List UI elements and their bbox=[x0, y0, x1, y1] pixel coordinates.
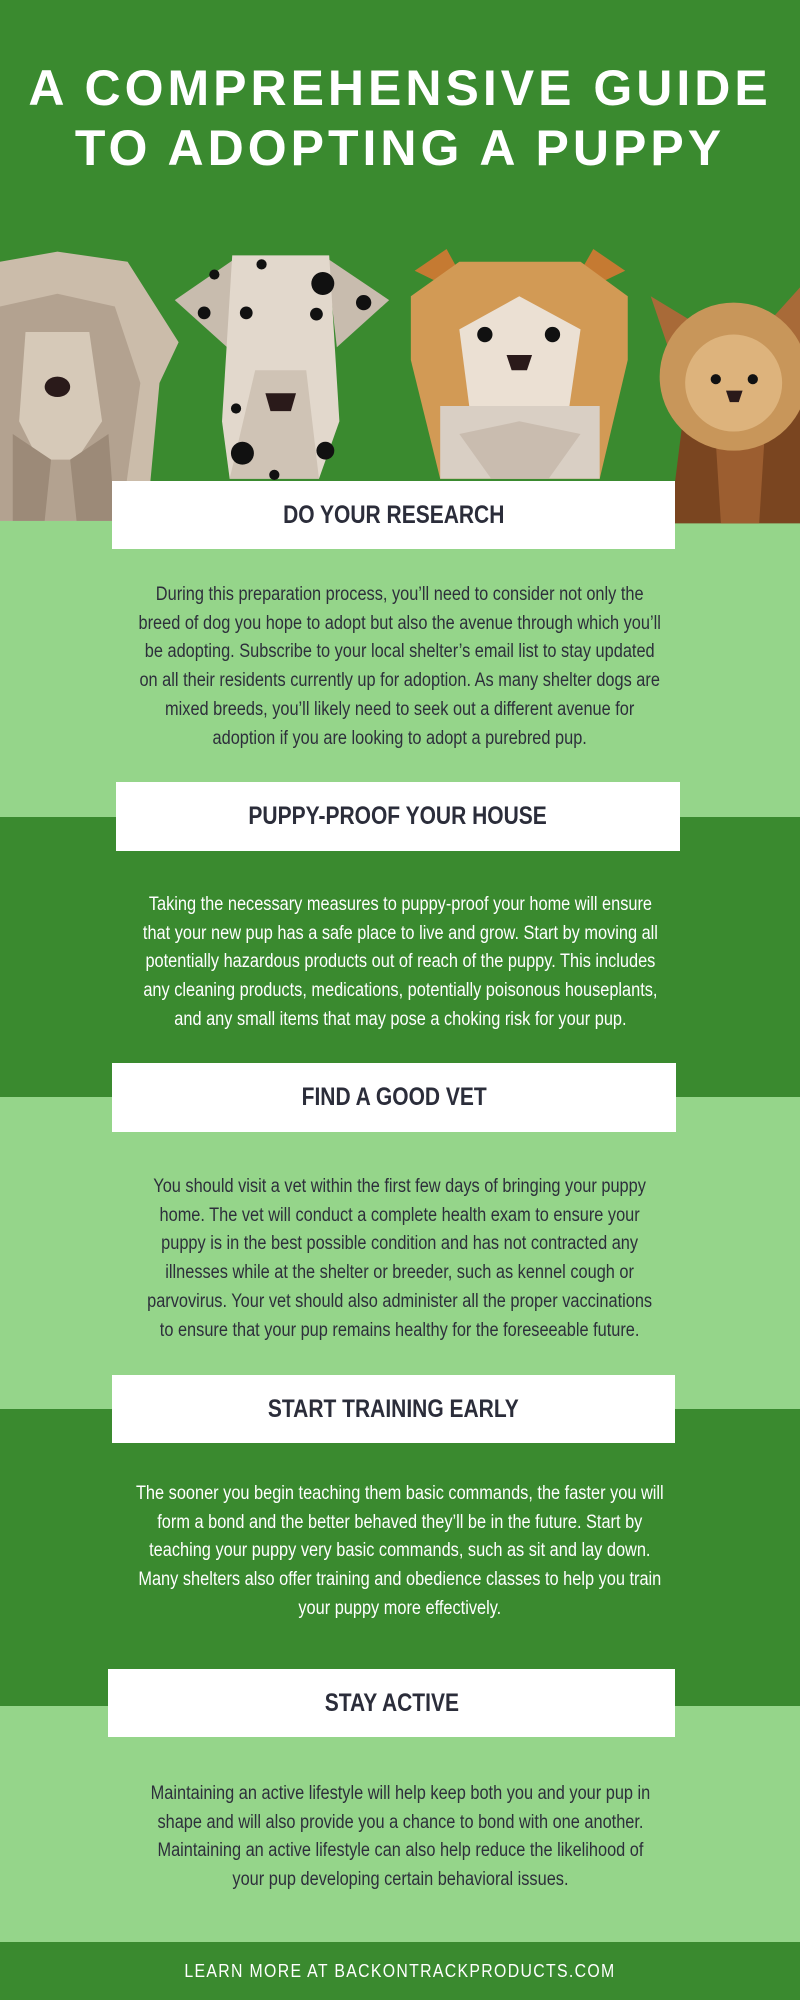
text: research: adoption if you are looking to adopt a purebred pup. bbox=[213, 728, 587, 749]
text: active: shape and will also provide you a chance to bond with one another. bbox=[157, 1812, 643, 1833]
footer: LEARN MORE AT BACKONTRACKPRODUCTS.COM bbox=[184, 1960, 616, 1980]
text: active: Maintaining an active lifestyle can also help reduce the likelihood of bbox=[157, 1840, 643, 1861]
text: training: form a bond and the better behaved they’ll be in the future. Start by bbox=[157, 1512, 643, 1533]
icon: sheepdog bbox=[0, 252, 179, 521]
icon: dalmatian bbox=[175, 255, 389, 480]
text: puppy-proof bbox=[142, 894, 658, 1030]
heading: active bbox=[108, 1669, 675, 1737]
text: training: teaching your puppy very basic commands, such as sit and lay down. bbox=[149, 1540, 651, 1561]
text: training: The sooner you begin teaching them basic commands, the faster you will bbox=[136, 1483, 664, 1504]
text: research: breed of dog you hope to adopt but also the avenue through which you’ll bbox=[139, 613, 661, 634]
text: research: During this preparation process, you’ll need to consider not only the bbox=[156, 584, 644, 605]
text: vet: home. The vet will conduct a complete health exam to ensure your bbox=[160, 1205, 640, 1226]
heading: vet bbox=[112, 1063, 676, 1132]
heading: puppy-proof: PUPPY-PROOF YOUR HOUSE bbox=[249, 802, 547, 830]
text: puppy-proof: and any small items that may pose a choking risk for your pup. bbox=[174, 1009, 626, 1030]
title: TO ADOPTING A PUPPY bbox=[75, 120, 725, 176]
icon: yorkie bbox=[651, 287, 800, 523]
text: training: your puppy more effectively. bbox=[299, 1598, 501, 1619]
heading: puppy-proof bbox=[116, 782, 680, 851]
text: puppy-proof: potentially hazardous products out of reach of the puppy. This includes bbox=[145, 951, 655, 972]
text: vet: You should visit a vet within the first few days of bringing your puppy bbox=[154, 1176, 646, 1197]
text: research: on all their residents currently up for adoption. As many shelter dogs are bbox=[140, 670, 660, 691]
text: research bbox=[139, 584, 661, 749]
text: vet: parvovirus. Your vet should also administer all the proper vaccinations bbox=[147, 1291, 653, 1312]
heading: vet: FIND A GOOD VET bbox=[301, 1083, 487, 1111]
text: vet: puppy is in the best possible condition and has not contracted any bbox=[162, 1233, 638, 1254]
text: vet: to ensure that your pup remains healthy for the foreseeable future. bbox=[160, 1320, 640, 1341]
text: puppy-proof: any cleaning products, medications, potentially poisonous houseplants, bbox=[143, 980, 657, 1001]
text: vet: illnesses while at the shelter or breeder, such as kennel cough or bbox=[166, 1262, 634, 1283]
text: puppy-proof: Taking the necessary measures to puppy-proof your home will ensure bbox=[148, 894, 652, 915]
heading: do your research: DO YOUR RESEARCH bbox=[283, 500, 504, 528]
title bbox=[28, 60, 772, 176]
illustration: dogs bbox=[0, 249, 800, 524]
text: active bbox=[150, 1783, 650, 1890]
heading: do your research bbox=[112, 481, 675, 549]
text: training bbox=[136, 1483, 664, 1619]
text: training: Many shelters also offer training and obedience classes to help you train bbox=[139, 1569, 661, 1590]
text: puppy-proof: that your new pup has a safe place to live and grow. Start by moving all bbox=[142, 923, 658, 944]
text: research: be adopting. Subscribe to your local shelter’s email list to stay updated bbox=[145, 641, 655, 662]
icon: shiba bbox=[411, 249, 628, 479]
title: A COMPREHENSIVE GUIDE bbox=[28, 60, 772, 116]
heading: active: STAY ACTIVE bbox=[324, 1688, 459, 1716]
heading: training: START TRAINING EARLY bbox=[268, 1394, 519, 1422]
text: active: your pup developing certain behavioral issues. bbox=[232, 1869, 568, 1890]
text: vet bbox=[147, 1176, 653, 1341]
text: active: Maintaining an active lifestyle will help keep both you and your pup in bbox=[150, 1783, 650, 1804]
footer bbox=[0, 1942, 800, 2000]
text: research: mixed breeds, you’ll likely need to seek out a different avenue for bbox=[165, 699, 635, 720]
heading: training bbox=[112, 1375, 675, 1443]
